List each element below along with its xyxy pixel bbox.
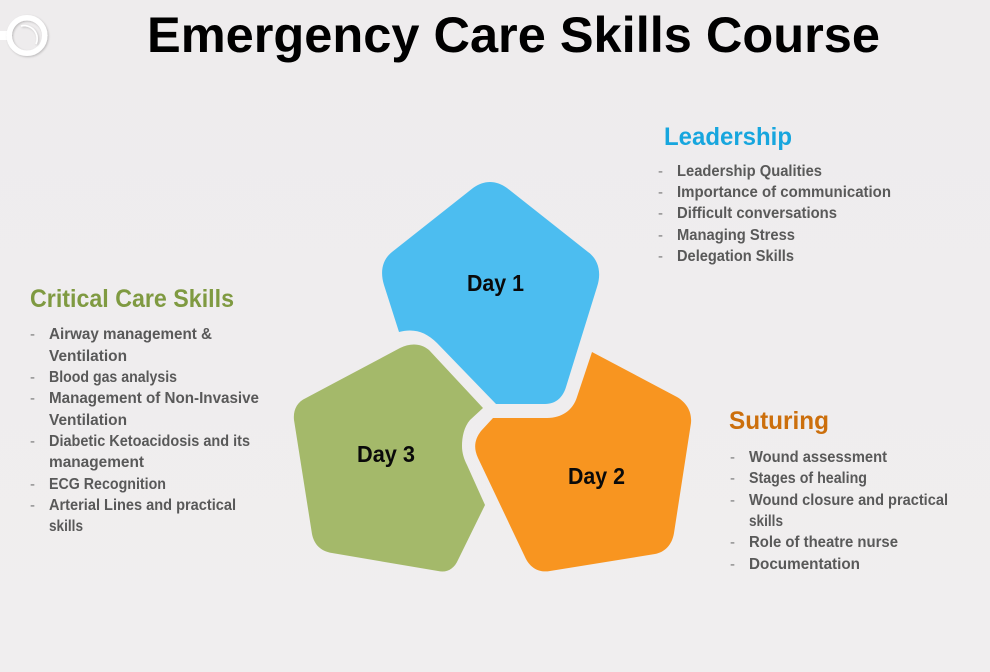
list: Critical care topics: - [30, 326, 35, 343]
list: Suturing topics: Wound assessment [749, 449, 887, 466]
list: Critical care topics [30, 326, 259, 535]
list: Leadership topics: Delegation Skills [677, 248, 794, 265]
list: Leadership topics: Importance of communication [677, 184, 891, 201]
list: Critical care topics: Ventilation [49, 348, 127, 365]
heading: Suturing: Suturing [729, 407, 829, 435]
list: Suturing topics: skills [749, 513, 783, 530]
list: Suturing topics: Stages of healing [749, 470, 867, 487]
list: Critical care topics: - [30, 476, 35, 493]
list: Suturing topics: - [730, 449, 735, 466]
list: Leadership topics [658, 163, 891, 265]
list: Suturing topics: Wound closure and practical [749, 492, 948, 509]
list: Critical care topics: - [30, 369, 35, 386]
list: Critical care topics: Airway management & [49, 326, 212, 343]
list: Critical care topics: Ventilation [49, 412, 127, 429]
list: Critical care topics: - [30, 497, 35, 514]
list: Critical care topics: Management of Non-Invasive [49, 390, 259, 407]
list: Suturing topics: - [730, 492, 735, 509]
pentagon: Day 3: Day 3 [357, 441, 415, 467]
panel: Leadership [658, 123, 891, 265]
list: Suturing topics: - [730, 556, 735, 573]
list: Leadership topics: - [658, 163, 663, 180]
list: Critical care topics: Blood gas analysis [49, 369, 177, 386]
pentagon: Day 1 [382, 182, 599, 404]
pentagon: Day 3 [294, 344, 485, 572]
diagram: three day pentagons [294, 182, 691, 572]
list: Critical care topics: skills [49, 518, 83, 535]
list: Leadership topics: Leadership Qualities [677, 163, 822, 180]
list: Critical care topics: - [30, 433, 35, 450]
list: Suturing topics: Role of theatre nurse [749, 534, 898, 551]
list: Critical care topics: Arterial Lines and practical [49, 497, 236, 514]
title: Emergency Care Skills Course [147, 7, 880, 63]
list: Suturing topics: - [730, 470, 735, 487]
panel: Critical Care Skills [30, 285, 259, 535]
list: Leadership topics: - [658, 184, 663, 201]
panel: Suturing [729, 407, 948, 573]
list: Critical care topics: - [30, 390, 35, 407]
list: Leadership topics: - [658, 205, 663, 222]
icon: ring ornament [0, 18, 45, 53]
list: Critical care topics: management [49, 454, 144, 471]
list: Critical care topics: ECG Recognition [49, 476, 166, 493]
list: Leadership topics: - [658, 227, 663, 244]
list: Leadership topics: Difficult conversations [677, 205, 837, 222]
list: Suturing topics [730, 449, 948, 573]
heading: Leadership: Leadership [664, 123, 792, 151]
list: Suturing topics: - [730, 534, 735, 551]
list: Leadership topics: Managing Stress [677, 227, 795, 244]
pentagon: Day 2: Day 2 [568, 463, 625, 489]
pentagon: Day 2 [475, 352, 691, 571]
list: Leadership topics: - [658, 248, 663, 265]
pentagon: Day 1: Day 1 [467, 270, 524, 296]
list: Critical care topics: Diabetic Ketoacidosis and its [49, 433, 250, 450]
list: Suturing topics: Documentation [749, 556, 860, 573]
heading: Critical Care Skills: Critical Care Skills [30, 285, 234, 313]
